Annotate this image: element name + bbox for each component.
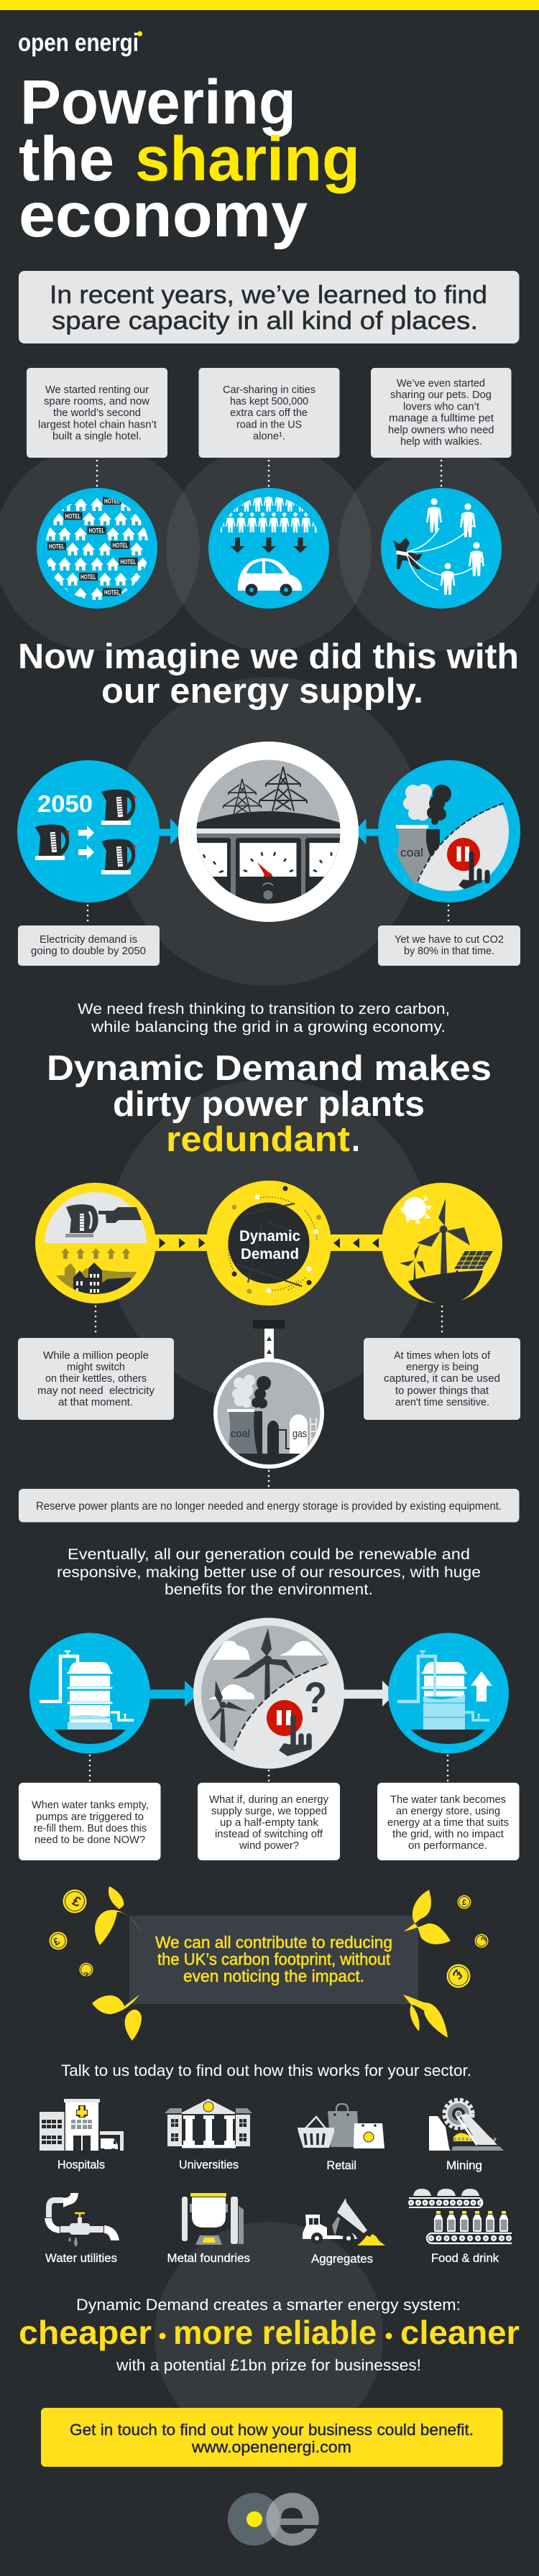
callout: carbon footprint: the UK’s carbon footprint, without xyxy=(157,1950,391,1969)
callout: a million kettles: might switch xyxy=(67,1361,125,1373)
icon: leaves xyxy=(92,1886,451,2041)
logo: open energi: open energi xyxy=(18,29,139,57)
callout: electricity demand: going to double by 2050 xyxy=(31,945,146,957)
icon: coins: £ xyxy=(51,1935,62,1948)
callout: a million kettles: may not need electricity xyxy=(37,1385,155,1397)
panel: pet sharing xyxy=(371,368,512,609)
slogan: cheaper, more reliable, cleaner: cleaner xyxy=(400,2314,520,2351)
icon: kettle and homes xyxy=(35,1183,156,1303)
card: pet sharing: manage a fulltime pet xyxy=(389,412,494,424)
icon: coins: £ xyxy=(479,1935,488,1943)
label: hospitals: Hospitals xyxy=(57,2158,105,2171)
text: fresh thinking: while balancing the grid in a growing economy. xyxy=(91,1019,446,1035)
icon: kettles 2050 circle: 2050 xyxy=(37,790,93,817)
callout: water tank becomes: energy at a time that suits xyxy=(387,1816,509,1829)
text: eventually: benefits for the environment. xyxy=(165,1582,373,1598)
callout: a million kettles: While a million people xyxy=(43,1349,149,1362)
arrows between water steps xyxy=(144,1681,395,1707)
callout: what if: wind power? xyxy=(239,1839,299,1852)
callout: water tank becomes: on performance. xyxy=(408,1839,487,1852)
icon: reserve power plant: coal xyxy=(231,1428,250,1440)
callout: carbon footprint: even noticing the impact. xyxy=(183,1967,364,1985)
heading: dynamic demand xyxy=(47,1049,492,1159)
callout: what if xyxy=(198,1771,340,1860)
callout: water tank becomes: an energy store, using xyxy=(396,1805,500,1817)
title xyxy=(19,68,360,250)
heading: now imagine: our energy supply. xyxy=(101,672,423,711)
icon: renewables xyxy=(382,1183,502,1304)
callout: lots of energy: energy is being xyxy=(406,1361,479,1373)
card: spare rooms: largest hotel chain hasn’t xyxy=(38,418,157,431)
icon: kettles 2050 circle xyxy=(17,760,160,902)
callout: carbon footprint: We can all contribute to reducing xyxy=(155,1933,392,1952)
slogan: cheaper, more reliable, cleaner xyxy=(19,2314,520,2351)
card: spare rooms xyxy=(27,368,167,458)
label: mining: Mining xyxy=(446,2159,482,2172)
icon: reserve power plant: gas xyxy=(292,1428,307,1440)
card: car sharing: has kept 500,000 xyxy=(230,395,308,407)
background discs behind sharing examples xyxy=(0,446,539,651)
text: talk to us: Talk to us today to find out how this works for your sector. xyxy=(61,2062,471,2079)
card: car sharing: Car-sharing in cities xyxy=(223,384,315,396)
heading: now imagine: Now imagine we did this with xyxy=(18,637,519,676)
callout: a million kettles: at that moment. xyxy=(58,1396,133,1408)
icon: coal pause circle: coal xyxy=(400,846,423,859)
card: car sharing: extra cars off the xyxy=(230,407,308,419)
heading: dynamic demand: Dynamic Demand makes xyxy=(47,1049,492,1088)
text: smarter energy system: Dynamic Demand creates a smarter energy system: xyxy=(76,2296,461,2314)
card: pet sharing: sharing our pets. Dog xyxy=(390,389,492,401)
icon: coins xyxy=(49,1889,489,1988)
background disc: dynamic demand xyxy=(107,1079,430,1403)
callout: reserve power plants: Reserve power plants are no longer needed and energy storage is provided by existing equipment. xyxy=(36,1500,502,1513)
icon: turbines and pause: ? xyxy=(304,1674,327,1722)
callout: lots of energy: to power things that xyxy=(395,1385,489,1397)
icon: coins: £ xyxy=(448,1967,466,1982)
callout: cut CO2 xyxy=(378,905,520,966)
sector: metal foundries xyxy=(182,2193,244,2245)
call to action: Get in touch to find out how your business could benefit. xyxy=(70,2421,474,2439)
icon: empty water tank xyxy=(29,1633,150,1753)
icon: turbines and pause xyxy=(193,1617,345,1771)
icon: dynamic demand hub xyxy=(206,1181,331,1306)
title: Powering xyxy=(20,68,296,137)
callout: water tank becomes: The water tank becomes xyxy=(390,1793,506,1806)
card: spare rooms: We started renting our xyxy=(45,384,149,396)
background disc: grid xyxy=(114,677,423,986)
heading: dynamic demand: . xyxy=(351,1120,360,1159)
callout: a million kettles: on their kettles, others xyxy=(45,1372,147,1385)
icon: hotel circle xyxy=(37,461,157,609)
callout: water tank becomes xyxy=(377,1755,519,1860)
sector: hospitals xyxy=(40,2099,124,2151)
heading: dynamic demand: redundant xyxy=(166,1120,350,1159)
text: fresh thinking xyxy=(78,1001,450,1035)
sector: water utilities xyxy=(45,2193,119,2247)
slogan: cheaper, more reliable, cleaner: cheaper xyxy=(19,2314,152,2351)
callout: lots of energy: captured, it can be used xyxy=(384,1372,500,1385)
slogan: cheaper, more reliable, cleaner: more reliable xyxy=(173,2314,377,2351)
callout: reserve power plants xyxy=(19,1471,519,1522)
callout: what if: What if, during an energy xyxy=(209,1793,328,1806)
title: economy xyxy=(19,180,308,250)
card: pet sharing xyxy=(371,368,512,458)
sector: aggregates xyxy=(303,2198,385,2245)
callout: what if: instead of switching off xyxy=(215,1828,323,1840)
icon: dynamic demand hub: Demand xyxy=(241,1246,299,1262)
card: spare rooms: the world’s second xyxy=(53,407,141,419)
card: pet sharing: lovers who can’t xyxy=(403,401,480,412)
arrows into grid xyxy=(155,818,383,844)
label: universities: Universities xyxy=(179,2158,239,2171)
text: eventually: Eventually, all our generation could be renewable and xyxy=(68,1546,470,1563)
icon: full water tank xyxy=(388,1633,509,1753)
callout: what if: supply surge, we topped xyxy=(211,1805,327,1817)
heading: now imagine xyxy=(18,637,519,711)
label: aggregates: Aggregates xyxy=(311,2252,373,2266)
logo mark xyxy=(228,2493,319,2546)
callout: cut CO2: by 80% in that time. xyxy=(404,945,494,957)
callout: cut CO2: Yet we have to cut CO2 xyxy=(395,933,504,946)
callout: water tanks empty: When water tanks empty, xyxy=(32,1799,149,1811)
text: eventually: responsive, making better use of our resources, with huge xyxy=(57,1564,481,1581)
card: car sharing: alone¹. xyxy=(253,430,285,443)
intro panel: spare capacity in all kind of places. xyxy=(52,307,478,335)
card: pet sharing: help with walkies. xyxy=(400,435,482,448)
icon: coins: £ xyxy=(462,1898,466,1907)
connectors with arrows xyxy=(151,1234,388,1251)
callout: electricity demand xyxy=(18,905,160,966)
label: water utilities: Water utilities xyxy=(45,2251,117,2265)
icon: coins: £ xyxy=(70,1893,83,1911)
sector: universities xyxy=(165,2099,252,2148)
callout: what if: up a half-empty tank xyxy=(220,1816,318,1829)
background disc: smarter energy xyxy=(155,2222,383,2450)
panel: hotel sharing xyxy=(27,368,167,609)
text: fresh thinking: We need fresh thinking to transition to zero carbon, xyxy=(78,1001,450,1017)
sector: mining xyxy=(429,2100,504,2151)
icon: reserve power plant xyxy=(213,1320,324,1475)
icon: dog walkers circle xyxy=(381,461,502,609)
icon: dynamic demand hub: Dynamic xyxy=(239,1228,300,1245)
label: metal foundries: Metal foundries xyxy=(167,2251,250,2265)
icon: coins: £ xyxy=(83,1970,89,1979)
callout: electricity demand: Electricity demand is xyxy=(40,933,137,946)
label: food and drink: Food & drink xyxy=(431,2251,499,2265)
card: spare rooms: spare rooms, and now xyxy=(44,395,149,407)
icon: coal pause circle xyxy=(378,760,520,902)
callout: water tanks empty: re-fill them. But does this xyxy=(34,1822,147,1834)
title: sharing xyxy=(135,124,360,194)
text: eventually xyxy=(57,1546,481,1598)
label: retail: Retail xyxy=(326,2159,356,2172)
intro panel: In recent years, we’ve learned to find xyxy=(50,281,487,309)
icon: power grid dial xyxy=(178,742,359,922)
card: car sharing xyxy=(198,368,339,458)
callout: water tanks empty xyxy=(19,1755,161,1860)
card: car sharing: road in the US xyxy=(236,418,302,431)
call to action xyxy=(41,2408,503,2467)
sector: retail xyxy=(298,2104,384,2148)
callout: water tanks empty: need to be done NOW? xyxy=(34,1834,145,1846)
title: the xyxy=(19,124,114,194)
card: spare rooms: built a single hotel. xyxy=(52,430,142,443)
call to action: www.openenergi.com xyxy=(191,2438,351,2456)
intro panel xyxy=(19,271,519,343)
card: pet sharing: help owners who need xyxy=(388,424,494,436)
sector: food and drink xyxy=(408,2189,512,2243)
callout: lots of energy: aren't time sensitive. xyxy=(395,1396,489,1408)
callout: a million kettles xyxy=(18,1306,174,1420)
panel: car sharing xyxy=(198,368,339,609)
callout: lots of energy xyxy=(364,1306,520,1420)
heading: dynamic demand: dirty power plants xyxy=(113,1085,425,1124)
callout: water tank becomes: the grid, with no impact xyxy=(392,1828,505,1840)
text: potential prize: with a potential £1bn prize for businesses! xyxy=(116,2356,421,2374)
callout: carbon footprint xyxy=(129,1916,418,2004)
callout: lots of energy: At times when lots of xyxy=(394,1349,491,1362)
top yellow bar xyxy=(0,0,539,10)
card: pet sharing: We’ve even started xyxy=(397,377,485,389)
callout: water tanks empty: pumps are triggered to xyxy=(36,1811,144,1823)
icon: people and car circle xyxy=(208,461,329,609)
